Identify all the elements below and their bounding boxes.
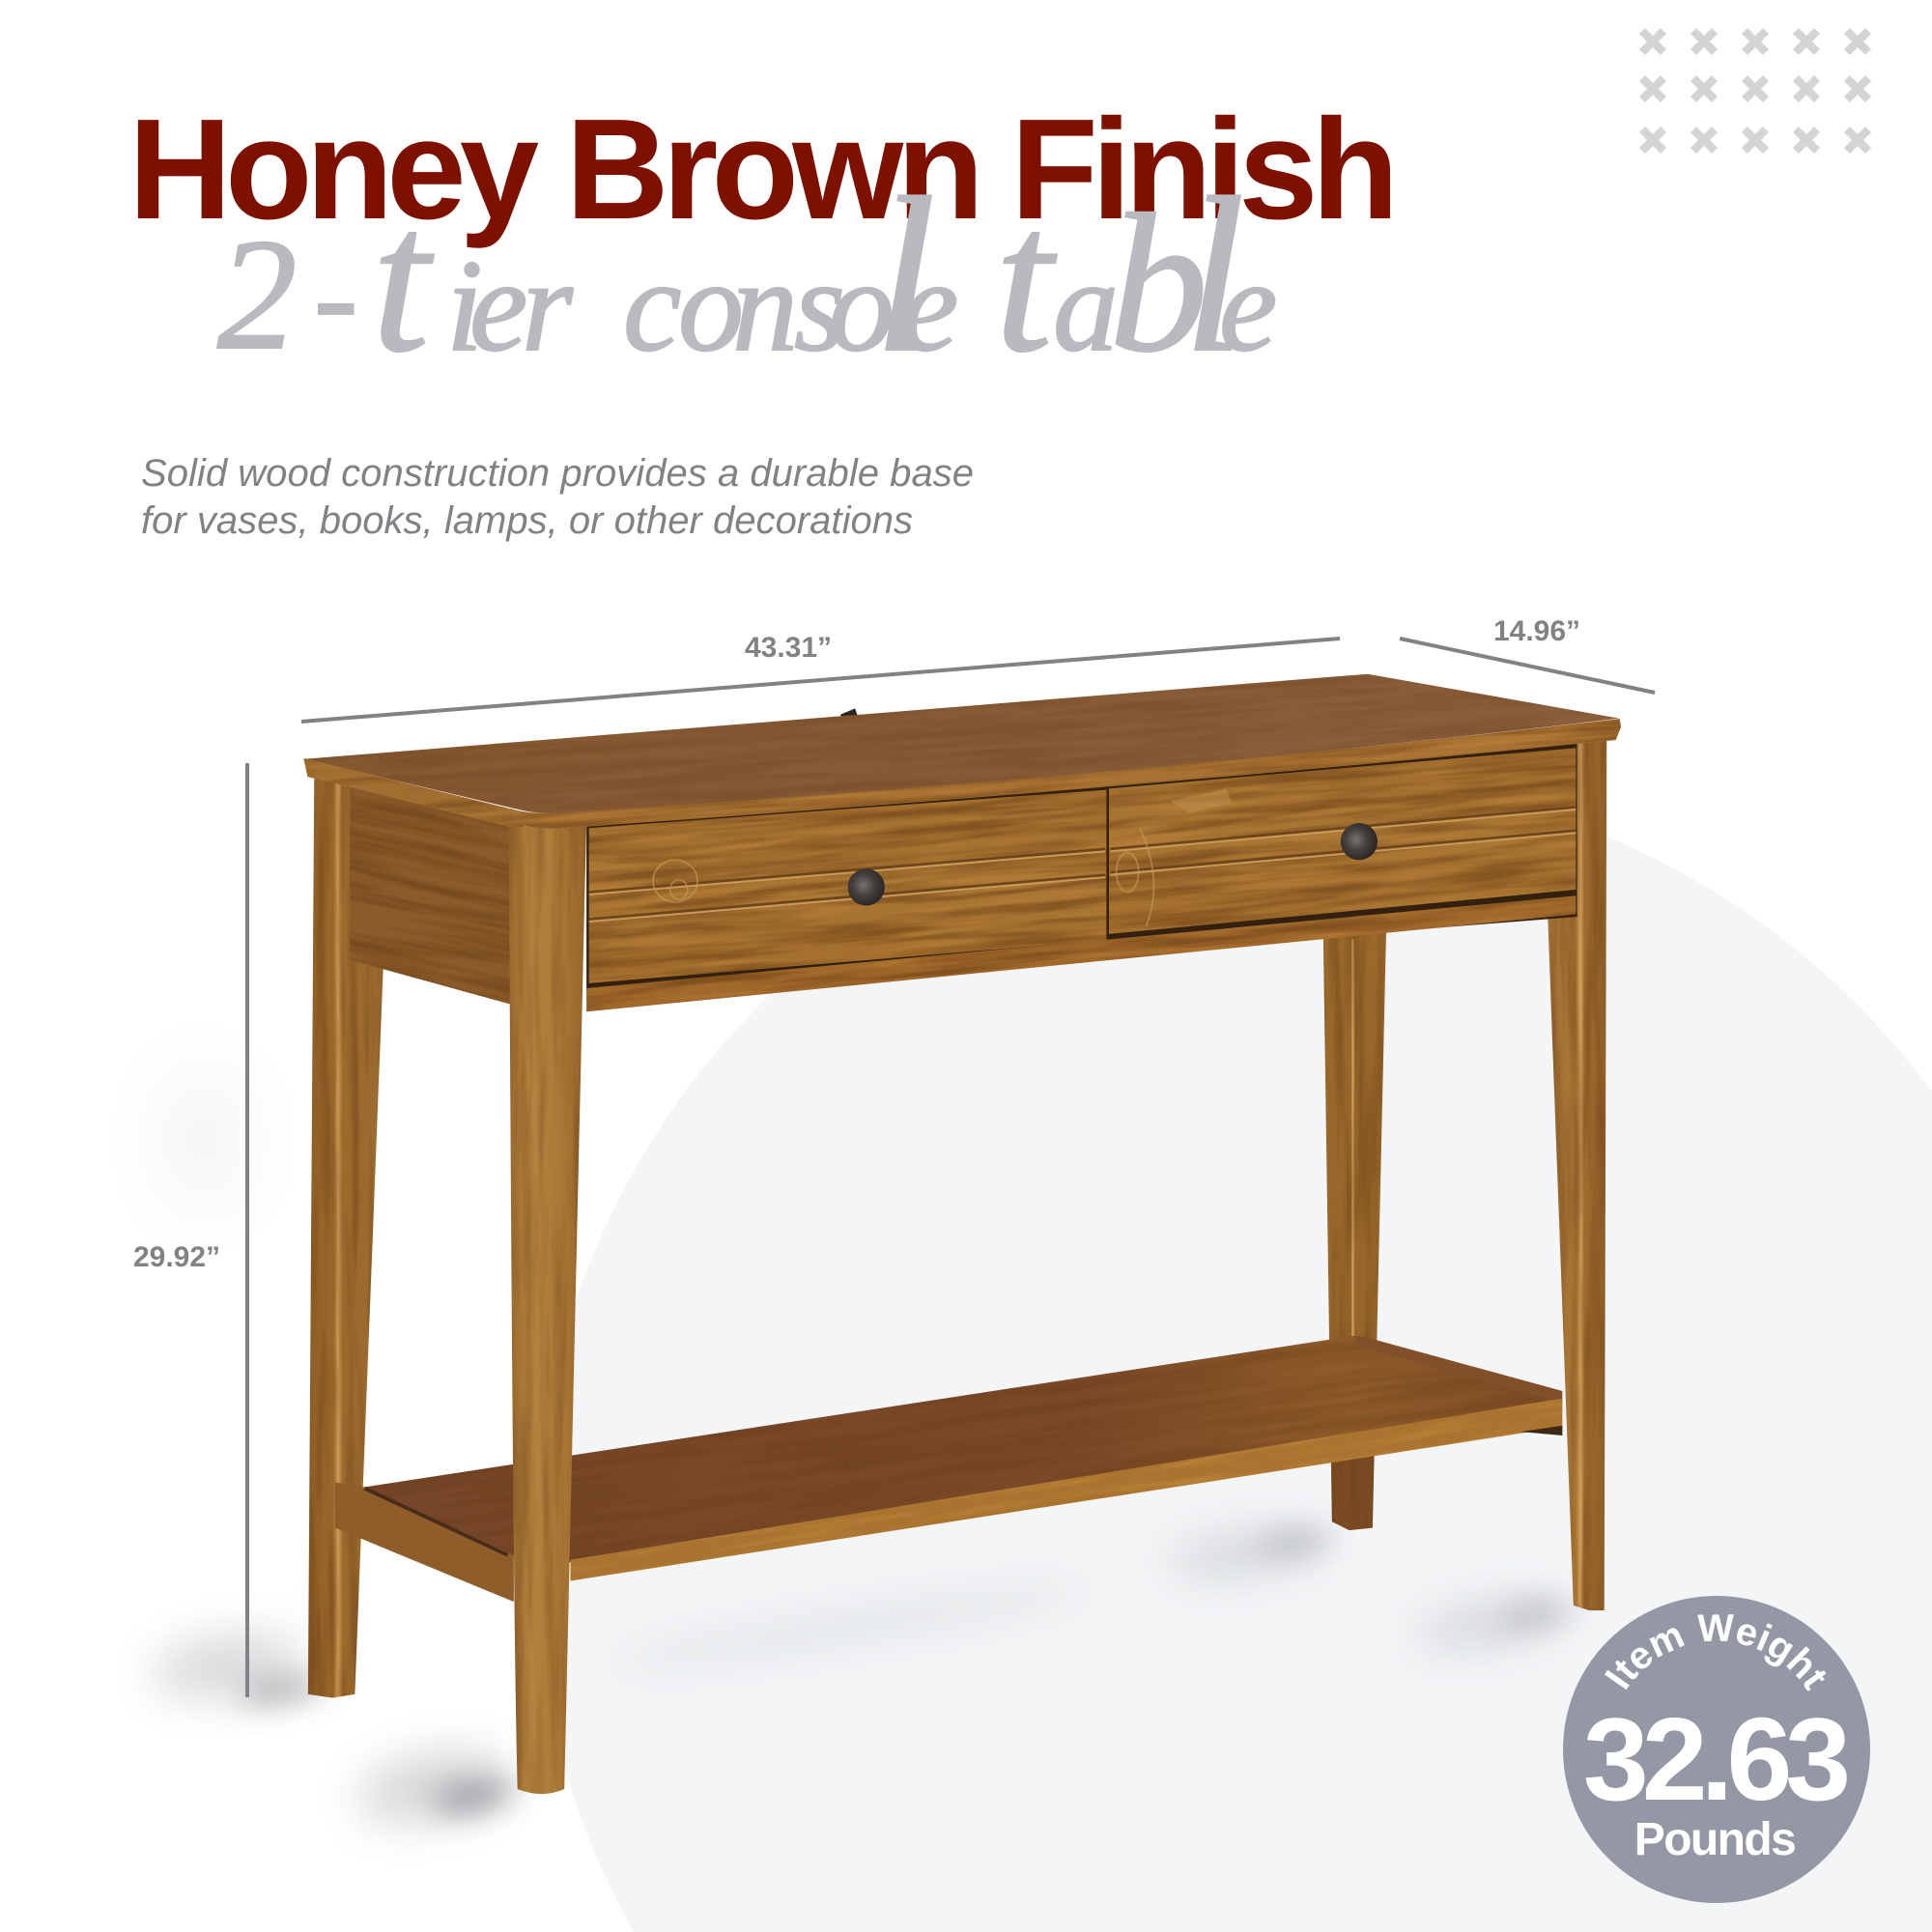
subtitle: handwritten style: o (829, 234, 895, 379)
right drawer (1109, 748, 1576, 934)
back right leg (1323, 933, 1386, 1530)
subtitle: handwritten style: c (623, 234, 681, 379)
drawer grain (586, 748, 1577, 1012)
right knob (1341, 823, 1378, 860)
subtitle: handwritten style: l (874, 152, 936, 398)
subtitle: handwritten style: i (446, 234, 483, 379)
subtitle: handwritten style: 2 (217, 206, 298, 383)
background: pale circle (534, 777, 1932, 1932)
soft floor shadows (148, 1065, 1576, 1833)
left side panel (350, 787, 510, 1005)
shelf front edge (571, 1399, 1562, 1580)
left rear leg (307, 779, 384, 1698)
subtitle: handwritten style: t (995, 164, 1058, 395)
title: Honey Brown Finish (128, 90, 1392, 249)
top surface (304, 674, 1619, 813)
dimension: depth line and label (1400, 615, 1655, 693)
top left edge (304, 759, 524, 827)
small clip behind table top (840, 708, 858, 720)
apron under drawers (586, 895, 1576, 1011)
left drawer (589, 790, 1106, 983)
subtitle: handwritten style: - (314, 224, 357, 369)
subtitle: handwritten style: l (1183, 152, 1245, 398)
dimension: height line and label: 29.92” (133, 1241, 220, 1273)
subtitle: handwritten style: n (732, 234, 798, 379)
shelf top surface (363, 1336, 1562, 1562)
dimension: width line and label (301, 632, 1340, 722)
subtitle: handwritten style: e (900, 234, 991, 379)
dimension: depth line and label: 14.96” (1493, 615, 1580, 647)
drawer grooves (589, 807, 1576, 922)
decorative x pattern (1642, 31, 1868, 151)
curved label: Item Weight (1605, 1614, 1826, 1691)
subtitle: handwritten style: b (1109, 174, 1208, 393)
right front leg (1548, 741, 1607, 1611)
shelf back rail (1355, 1336, 1562, 1404)
description text: for vases, books, lamps, or other decorations (141, 499, 913, 542)
console table illustration (199, 540, 1687, 1805)
subtitle: handwritten style: e (1219, 234, 1277, 379)
top front edge (511, 720, 1620, 828)
lighter knot on right drawer (1171, 788, 1233, 813)
weight value: 32.63 (1583, 1693, 1847, 1825)
dimension: width line and label: 43.31” (745, 632, 832, 664)
subtitle: handwritten style: r (522, 234, 606, 379)
description text (141, 452, 974, 542)
subtitle: handwritten style: s (794, 234, 845, 379)
drawer knots (653, 828, 1153, 926)
table top (303, 674, 1621, 829)
shadow gap behind drawers (586, 737, 1577, 996)
unit: Pounds (1634, 1814, 1795, 1865)
subtitle: handwritten style: a (1053, 234, 1119, 379)
description text: Solid wood construction provides a durable base (141, 452, 974, 495)
shelf left rail (335, 1482, 514, 1602)
subtitle: handwritten style: o (678, 234, 744, 379)
left knob (848, 868, 885, 905)
subtitle: handwritten style: e (469, 234, 527, 379)
subtitle: handwritten style: t (372, 164, 435, 395)
lower shelf (335, 1335, 1563, 1602)
item weight badge (1563, 1596, 1870, 1903)
front centre leg (508, 825, 586, 1795)
